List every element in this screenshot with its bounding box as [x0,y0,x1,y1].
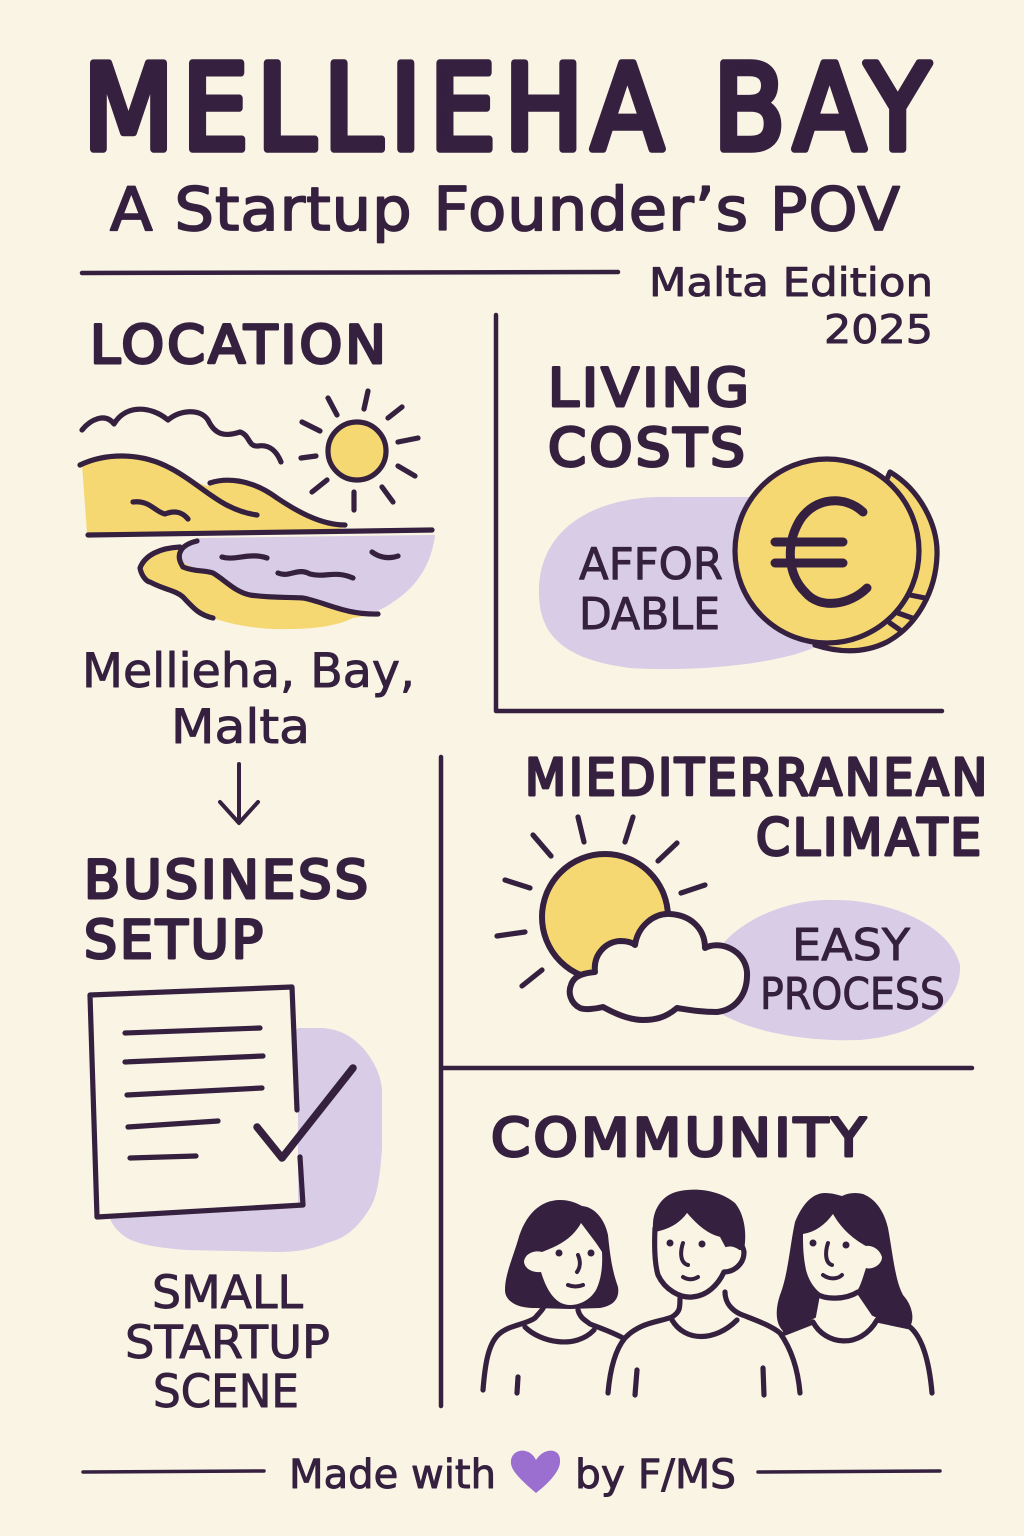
heading: climate [525,749,990,868]
icon: document with check [90,987,382,1252]
icon: three people [483,1190,932,1395]
heading: climate: MIEDITERRANEAN [525,749,990,808]
panel: location [80,315,435,755]
badge: affordable: AFFOR [579,539,723,590]
heading: living costs: LIVING [548,358,752,419]
heading: climate: CLIMATE [756,809,984,868]
label: small startup scene: SMALL [152,1266,303,1319]
footer [83,1451,940,1498]
subtitle: A Startup Founder’s POV [110,175,901,245]
icon: sun and cloud [497,817,747,1020]
badge: easy process: EASY [792,920,910,971]
heading: community: COMMUNITY [491,1108,869,1169]
illustration: bay and sun [80,391,435,629]
icon: euro coin [735,459,937,651]
heading: location: LOCATION [90,315,389,376]
heading: business setup: BUSINESS [84,850,371,911]
edition label [649,261,933,353]
edition label: 2025 [824,308,933,353]
heading: living costs: COSTS [548,418,748,479]
footer: Made with [289,1452,496,1498]
arrow [220,764,258,823]
badge: easy process: PROCESS [760,969,945,1020]
person: right [777,1193,932,1393]
badge: easy process [715,900,960,1040]
edition label: Malta Edition [649,261,933,306]
panel: community [483,1108,932,1395]
location label: Mellieha, Bay, [82,644,415,699]
heading: business setup: SETUP [84,910,266,971]
panel: business setup [84,850,382,1418]
label: small startup scene: STARTUP [125,1316,330,1369]
icon: heart [511,1451,560,1493]
footer: by F/MS [575,1452,736,1498]
panel: living costs [539,358,937,669]
label: small startup scene [125,1266,330,1418]
location label [82,644,415,755]
label: small startup scene: SCENE [153,1365,299,1418]
heading: business setup [84,850,371,971]
title: MELLIEHA BAY [83,39,938,177]
heading: living costs [548,358,752,479]
person: centre [608,1190,800,1395]
badge: affordable: DABLE [579,589,720,640]
panel: climate [497,749,990,1040]
location label: Malta [171,700,310,755]
badge: affordable [539,497,820,669]
person: left [483,1200,623,1393]
